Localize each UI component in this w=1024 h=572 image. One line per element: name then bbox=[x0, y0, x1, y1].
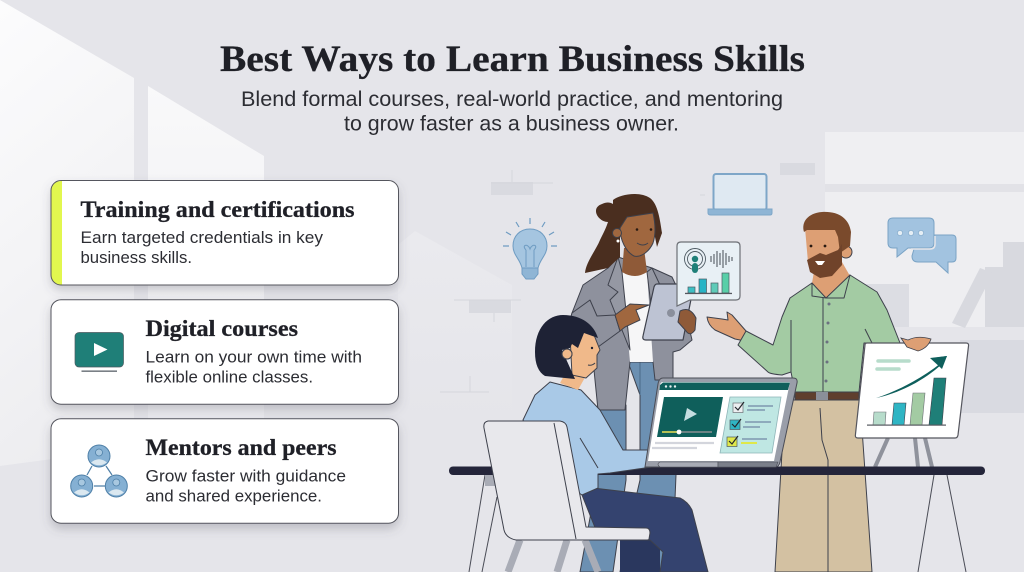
lapels bbox=[608, 257, 630, 350]
text: digital description: flexible online classes. bbox=[146, 368, 313, 386]
checklist panel bbox=[720, 397, 781, 453]
text: mentors description: and shared experience. bbox=[146, 488, 322, 506]
trousers bbox=[775, 400, 872, 572]
jeans right leg bbox=[620, 362, 677, 572]
subtitle: Blend formal courses, real-world practice, and mentoring bbox=[241, 88, 783, 111]
panel: mentors and peers bbox=[51, 419, 398, 523]
text: training description: business skills. bbox=[80, 249, 192, 267]
hand bbox=[659, 450, 694, 464]
callout: podcast and chart bubble bbox=[677, 242, 740, 306]
icon: connected people bbox=[71, 445, 127, 497]
panel: training and certifications bbox=[51, 180, 398, 286]
illustration: seated woman bbox=[484, 315, 708, 572]
illustration: presentation board bbox=[855, 337, 969, 467]
text: digital description: Learn on your own time with bbox=[146, 348, 362, 366]
jeans left leg bbox=[580, 405, 626, 572]
neck bbox=[560, 372, 588, 390]
illustration: laptop with course bbox=[645, 378, 797, 467]
text: digital description bbox=[146, 348, 362, 386]
hair bbox=[535, 315, 598, 379]
pointing arm bbox=[566, 300, 620, 347]
beard bbox=[807, 244, 842, 278]
text: mentors description bbox=[146, 468, 346, 506]
icon: video screen bbox=[75, 332, 124, 372]
subtitle bbox=[241, 88, 783, 136]
heading: training: Training and certifications bbox=[80, 197, 355, 222]
text: mentors description: Grow faster with guidance bbox=[146, 468, 346, 486]
chair legs bbox=[508, 540, 648, 572]
shirt bbox=[738, 275, 900, 392]
heading: digital courses: Digital courses bbox=[146, 316, 298, 341]
hair bbox=[803, 212, 851, 253]
illustration: standing man bbox=[738, 212, 900, 572]
neck bbox=[812, 262, 850, 298]
chair bbox=[484, 421, 650, 540]
jacket bbox=[566, 257, 692, 410]
laptop base bbox=[658, 462, 718, 467]
trousers bbox=[582, 488, 708, 572]
illustration: standing woman bbox=[566, 194, 696, 572]
shirt bbox=[622, 272, 653, 362]
table bbox=[449, 466, 985, 572]
hair bbox=[585, 194, 662, 273]
belt bbox=[795, 392, 859, 400]
holding hand bbox=[678, 310, 696, 334]
panel: digital courses bbox=[51, 300, 398, 404]
text: training description: Earn targeted credentials in key bbox=[80, 229, 324, 247]
shirt bbox=[523, 382, 660, 495]
text: training description bbox=[80, 229, 324, 267]
face bbox=[620, 213, 655, 256]
tablet bbox=[643, 284, 694, 340]
hand on board bbox=[901, 337, 931, 351]
subtitle: to grow faster as a business owner. bbox=[344, 112, 679, 136]
easel legs bbox=[875, 438, 932, 467]
icon: light bulb bbox=[503, 218, 557, 279]
collar bbox=[812, 275, 850, 298]
title: Best Ways to Learn Business Skills bbox=[220, 39, 805, 80]
illustration: open hand of man bbox=[707, 312, 746, 341]
face bbox=[570, 330, 600, 378]
icon: chat bubbles bbox=[888, 218, 956, 273]
neck bbox=[622, 248, 647, 276]
icon: laptop bbox=[708, 174, 772, 215]
video panel bbox=[657, 397, 723, 437]
back leg bbox=[620, 535, 660, 572]
face bbox=[805, 225, 844, 275]
heading: mentors: Mentors and peers bbox=[146, 435, 337, 460]
